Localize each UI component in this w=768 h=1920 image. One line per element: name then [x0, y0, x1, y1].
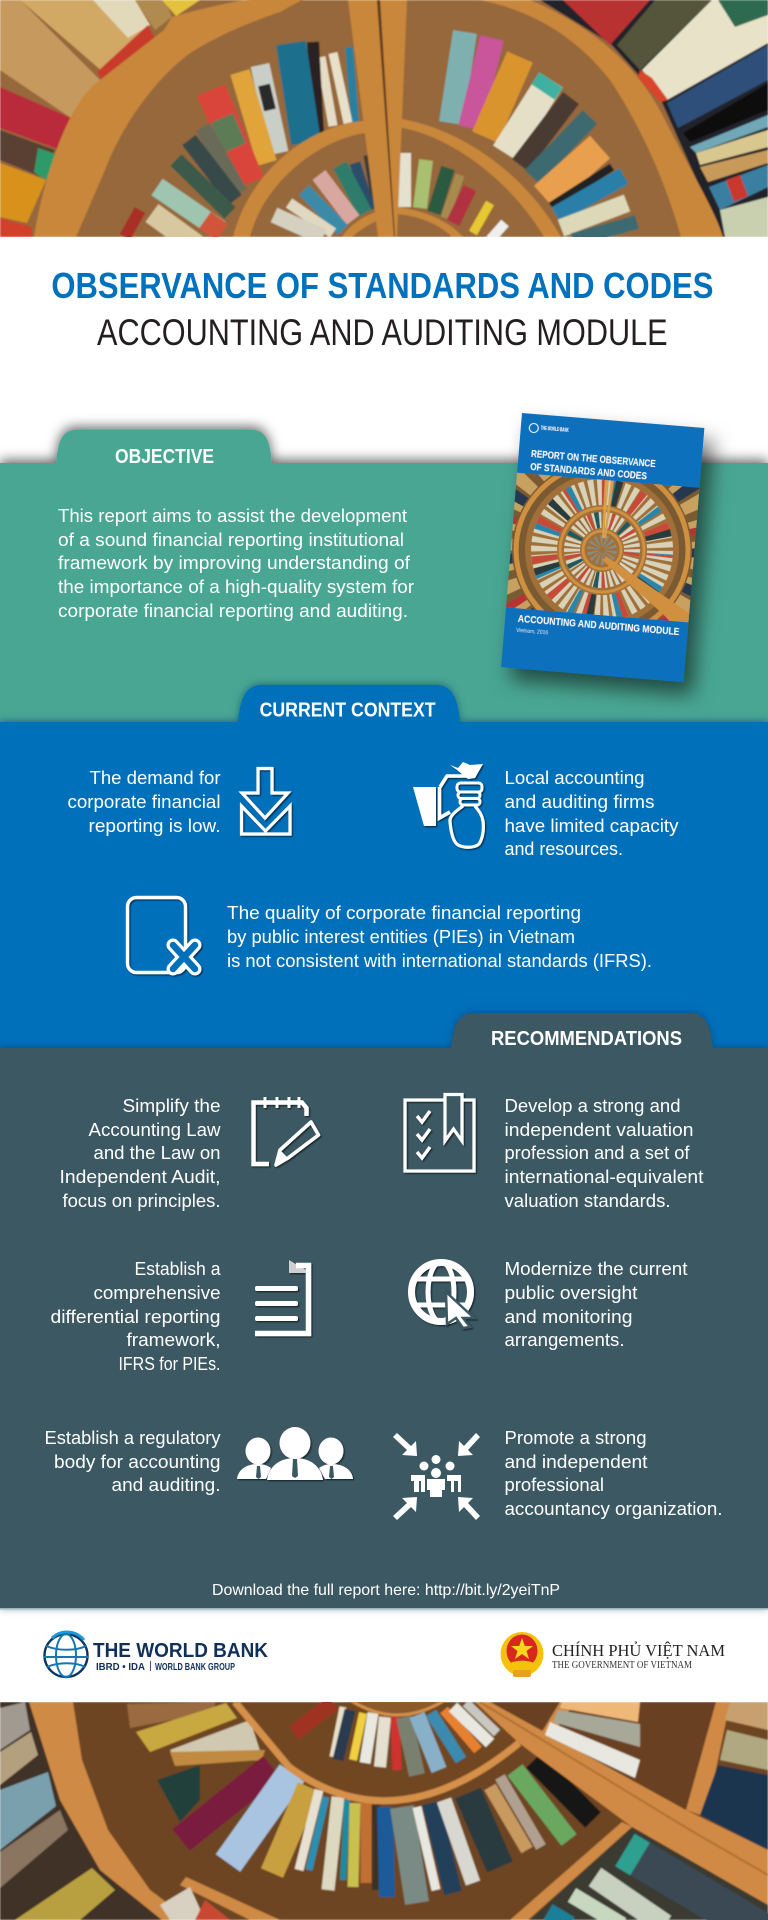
left outer books [0, 0, 100, 120]
icon: three business people [237, 1427, 353, 1480]
text: simplify the law: focus on principles. [62, 1191, 220, 1211]
middle ring books [181, 1760, 593, 1903]
text: public oversight [504, 1259, 688, 1350]
icon: world bank globe [44, 1632, 88, 1677]
text: quality of reporting: The quality of corporate financial reporting [227, 903, 581, 923]
text: valuation profession: profession and a set of [504, 1143, 691, 1163]
text: reporting framework: IFRS for PIEs. [118, 1354, 220, 1374]
logo: government of vietnam: CHÍNH PHỦ VIỆT NAM [552, 1641, 725, 1660]
text: reporting framework: Establish a [134, 1259, 221, 1279]
cover title: REPORT ON THE OBSERVANCE [531, 448, 656, 470]
text: regulatory body: and auditing. [112, 1475, 220, 1495]
text: quality of reporting: by public interest entities (PIEs) in Vietnam [227, 927, 575, 947]
heading: current context: CURRENT CONTEXT [260, 698, 436, 722]
text: public oversight: Modernize the current [504, 1259, 688, 1279]
first ring books, left [125, 32, 637, 245]
text: valuation profession: international-equivalent [504, 1167, 704, 1187]
upper-left compartment [127, 1702, 215, 1728]
text: simplify the law: Independent Audit, [60, 1167, 220, 1187]
cover logo [529, 423, 569, 435]
text: reporting framework: framework, [126, 1330, 220, 1350]
inner ring shelf [342, 212, 376, 237]
text: valuation profession: Develop a strong and [504, 1096, 680, 1116]
panel: objective [0, 430, 768, 722]
cover logo: THE WORLD BANK [541, 426, 569, 434]
logo: government of vietnam: THE GOVERNMENT OF VIETNAM [552, 1660, 693, 1671]
text: simplify the law: Simplify the [122, 1096, 220, 1116]
photo: bottom circular bookshelf [0, 1700, 768, 1920]
objective text: corporate financial reporting and auditing. [58, 601, 408, 621]
photo: top circular bookshelf [0, 0, 768, 245]
icon: people with converging arrows [393, 1433, 480, 1520]
diagonal beam [475, 1702, 768, 1905]
text: local firms: and resources. [504, 839, 623, 859]
logo: the world bank: THE WORLD BANK [93, 1640, 269, 1662]
text: download link: Download the full report here: http://bit.ly/2yeiTnP [212, 1582, 560, 1599]
upper ring books [294, 1703, 497, 1775]
logo: the world bank [44, 1632, 269, 1677]
text: professional organization [504, 1428, 722, 1519]
text: reporting framework: comprehensive [94, 1283, 220, 1303]
panel: recommendations [0, 1013, 768, 1609]
text: regulatory body: Establish a regulatory [44, 1428, 220, 1448]
recommendations background band and tab [0, 1013, 768, 1609]
icon: globe with cursor [412, 1262, 474, 1328]
cover subtitle: OF STANDARDS AND CODES [530, 461, 647, 482]
cover module title: ACCOUNTING AND AUDITING MODULE [517, 613, 680, 638]
text: reporting framework: differential reporting [50, 1307, 220, 1327]
center vertical boards [348, 0, 394, 237]
text: valuation profession [504, 1096, 704, 1211]
text: demand: corporate financial [68, 792, 220, 812]
small center ring [350, 1700, 445, 1715]
objective text: framework by improving understanding of [58, 553, 411, 573]
bottom-right rim and books [510, 1822, 632, 1920]
text: demand: reporting is low. [88, 816, 220, 836]
second ring shelf [233, 121, 365, 237]
text: demand [68, 768, 220, 836]
right outer books [540, 0, 768, 237]
objective text [58, 506, 414, 621]
icon: document with x [128, 898, 195, 972]
icon: download arrow [242, 768, 290, 834]
panel: current context [0, 685, 768, 1048]
second ring books [274, 153, 505, 240]
logo: government of vietnam [500, 1632, 725, 1677]
text: public oversight: arrangements. [504, 1330, 624, 1350]
text: local firms: have limited capacity [504, 816, 678, 836]
text: regulatory body [44, 1428, 220, 1495]
text: simplify the law [60, 1096, 222, 1211]
heading: objective: OBJECTIVE [115, 446, 214, 468]
text: demand: The demand for [90, 768, 220, 788]
text: valuation profession: valuation standards. [504, 1191, 670, 1211]
text: professional organization: accountancy organization. [504, 1499, 722, 1519]
text: local firms: Local accounting [504, 768, 644, 788]
inner back wall and ring [235, 1702, 519, 1801]
logo: the world bank: WORLD BANK GROUP [155, 1662, 235, 1673]
text: professional organization: Promote a strong [504, 1428, 646, 1448]
cover photo [506, 472, 700, 622]
logo: the world bank: IBRD • IDA [96, 1661, 145, 1673]
icon: document lines [255, 1260, 311, 1334]
bottom-left rim [180, 1877, 280, 1920]
orange outer band [28, 1702, 170, 1920]
context background band and tab [0, 685, 768, 1048]
objective text: of a sound financial reporting institutional [58, 530, 404, 550]
text: valuation profession: independent valuation [504, 1120, 694, 1140]
far right books [725, 1702, 768, 1730]
text: quality of reporting: is not consistent with international standards (IFRS). [227, 951, 652, 971]
upper-right compartment [490, 1702, 716, 1810]
text: simplify the law: and the Law on [94, 1143, 220, 1163]
text: professional organization: professional [504, 1475, 604, 1495]
objective background band and tab [0, 430, 768, 722]
text: regulatory body: body for accounting [54, 1452, 220, 1472]
text: local firms: and auditing firms [504, 792, 654, 812]
text: quality of reporting [227, 903, 652, 971]
report cover [482, 411, 722, 684]
icon: hand holding money bag [413, 762, 483, 847]
text: reporting framework [50, 1259, 221, 1374]
title [51, 265, 713, 353]
first ring books, right [451, 32, 465, 123]
cover date: Vietnam, 2016 [516, 628, 548, 636]
heading: recommendations: RECOMMENDATIONS [491, 1028, 682, 1050]
text: professional organization: and independent [504, 1452, 648, 1472]
icon: national emblem [500, 1632, 544, 1677]
objective text: This report aims to assist the development [58, 506, 407, 526]
text: public oversight: public oversight [504, 1283, 638, 1303]
objective text: the importance of a high-quality system for [58, 577, 414, 597]
text: simplify the law: Accounting Law [88, 1120, 222, 1140]
text: public oversight: and monitoring [504, 1307, 632, 1327]
icon: notepad and pencil [254, 1097, 318, 1165]
icon: checklist and bookmark [405, 1094, 474, 1171]
title: ACCOUNTING AND AUDITING MODULE [97, 312, 668, 353]
left outer books [0, 1702, 162, 1920]
outer shelf ring [34, 0, 320, 237]
text: local firms [504, 768, 678, 859]
